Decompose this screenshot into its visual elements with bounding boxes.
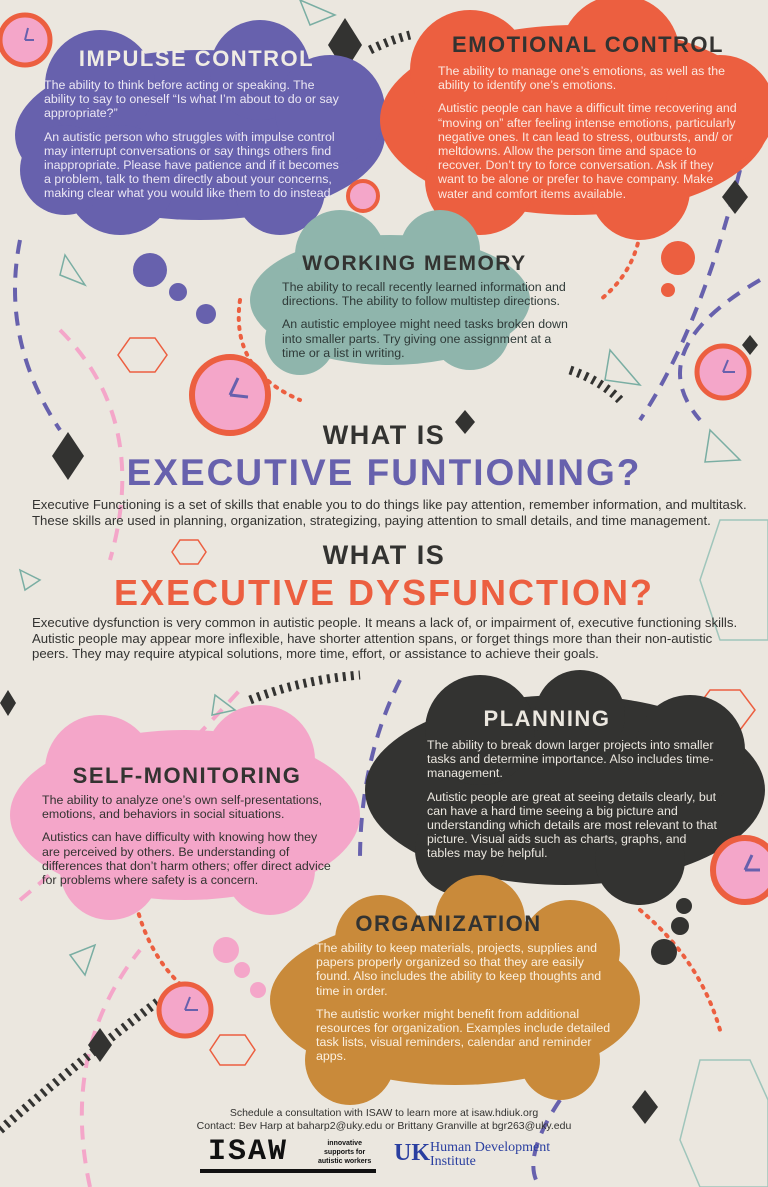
heading: what is executive functioning: EXECUTIVE FUNTIONING? [127, 452, 641, 493]
logo: ISAW [200, 1137, 376, 1173]
logo: ISAW: autistic workers [318, 1158, 371, 1165]
panel: self-monitoring: Autistics can have difficulty with knowing how they are perceived by others. Be understanding of differences that don’t harm others; offer direct advice for problems where safety is a concern. [42, 830, 331, 887]
cloud shapes [15, 20, 385, 235]
heading: organization: ORGANIZATION [355, 911, 542, 936]
heading: what is executive functioning: WHAT IS [323, 420, 445, 450]
panel: planning: The ability to break down larger projects into smaller tasks and determine importance. Also includes time-management. [427, 738, 714, 780]
panel: impulse control: The ability to think before acting or speaking. The ability to say to oneself “Is what I’m about to do or say appropriate?” [44, 78, 339, 120]
heading: planning: PLANNING [484, 706, 610, 731]
panel: self-monitoring: The ability to analyze one’s own self-presentations, emotions, and behaviors in social situations. [42, 793, 322, 821]
panel: working memory [282, 252, 568, 360]
footer: contact: Schedule a consultation with ISAW to learn more at isaw.hdiuk.org [230, 1107, 538, 1119]
text: executive dysfunction definition: Executive dysfunction is very common in autistic people. It means a lack of, or impairment of, executive functioning skills. Autistic people may appear more inflexible, have shorter attention spans, or forget things more than their non-autistic peers. They may require atypical solutions, more time, effort, or assistance to achieve their goals. [32, 615, 737, 661]
logo: UK Human Development Institute: Human Development [430, 1140, 550, 1155]
logo: ISAW: supports for [324, 1149, 365, 1156]
heading: what is executive functioning [127, 420, 641, 493]
panel: working memory: An autistic employee might need tasks broken down into smaller parts. Try giving one assignment at a time or a list in writing. [282, 317, 568, 360]
heading: impulse control: IMPULSE CONTROL [79, 46, 314, 71]
heading: what is executive dysfunction: EXECUTIVE DYSFUNCTION? [114, 572, 654, 613]
panel: self-monitoring [42, 763, 331, 887]
heading: emotional control: EMOTIONAL CONTROL [452, 32, 724, 57]
heading: self-monitoring: SELF-MONITORING [73, 763, 301, 788]
panel: organization [316, 911, 610, 1063]
panel: working memory: The ability to recall recently learned information and directions. The ability to follow multistep directions. [282, 280, 566, 308]
logo: ISAW: innovative [327, 1140, 362, 1147]
logo: UK Human Development Institute: UK [394, 1140, 430, 1166]
panel: emotional control: Autistic people can have a difficult time recovering and “moving on” after feeling intense emotions, particularly negative ones. It can lead to stress, outbursts, and/ or meltdowns. Allow the person time and space to recover. Don’t try to force conversation. Ask if they want to be alone or prefer to have company. Make water and comfort items available. [438, 101, 737, 201]
panel: organization: The autistic worker might benefit from additional resources for organization. Examples include detailed task lists, visual reminders, calendar and reminder apps. [316, 1007, 610, 1063]
panel: planning: Autistic people are great at seeing details clearly, but can have a hard time seeing a big picture and understanding which details are most relevant to that picture. Visual aids such as charts, graphs, and tables may be helpful. [427, 790, 717, 860]
logo: ISAW: ISAW [208, 1135, 288, 1169]
panel: planning [427, 706, 717, 860]
footer: contact [197, 1107, 571, 1132]
text: executive functioning definition: Executive Functioning is a set of skills that enable you to do things like pay attention, remember information, and multitask. These skills are used in planning, organization, strategizing, paying attention to small details, and time management. [32, 497, 747, 528]
panel: emotional control: The ability to manage one’s emotions, as well as the ability to identify one’s emotions. [438, 64, 725, 92]
heading: what is executive dysfunction [114, 540, 654, 613]
footer: contact: Contact: Bev Harp at baharp2@uky.edu or Brittany Granville at bgr263@uky.edu [197, 1120, 571, 1132]
heading: working memory: WORKING MEMORY [302, 252, 527, 275]
panel: impulse control [44, 46, 339, 200]
panel: emotional control [438, 32, 737, 201]
heading: what is executive dysfunction: WHAT IS [323, 540, 445, 570]
logo: UK Human Development Institute [394, 1140, 550, 1169]
panel: organization: The ability to keep materials, projects, supplies and papers properly organized so that they are easily found. Also includes the ability to keep thoughts and time in order. [316, 941, 601, 998]
logo: UK Human Development Institute: Institute [430, 1154, 476, 1169]
panel: impulse control: An autistic person who struggles with impulse control may interrupt conversations or say things others find inappropriate. Please have patience and if it becomes a problem, talk to them directly about your concerns, making clear what you would like them to do instead. [44, 130, 339, 200]
